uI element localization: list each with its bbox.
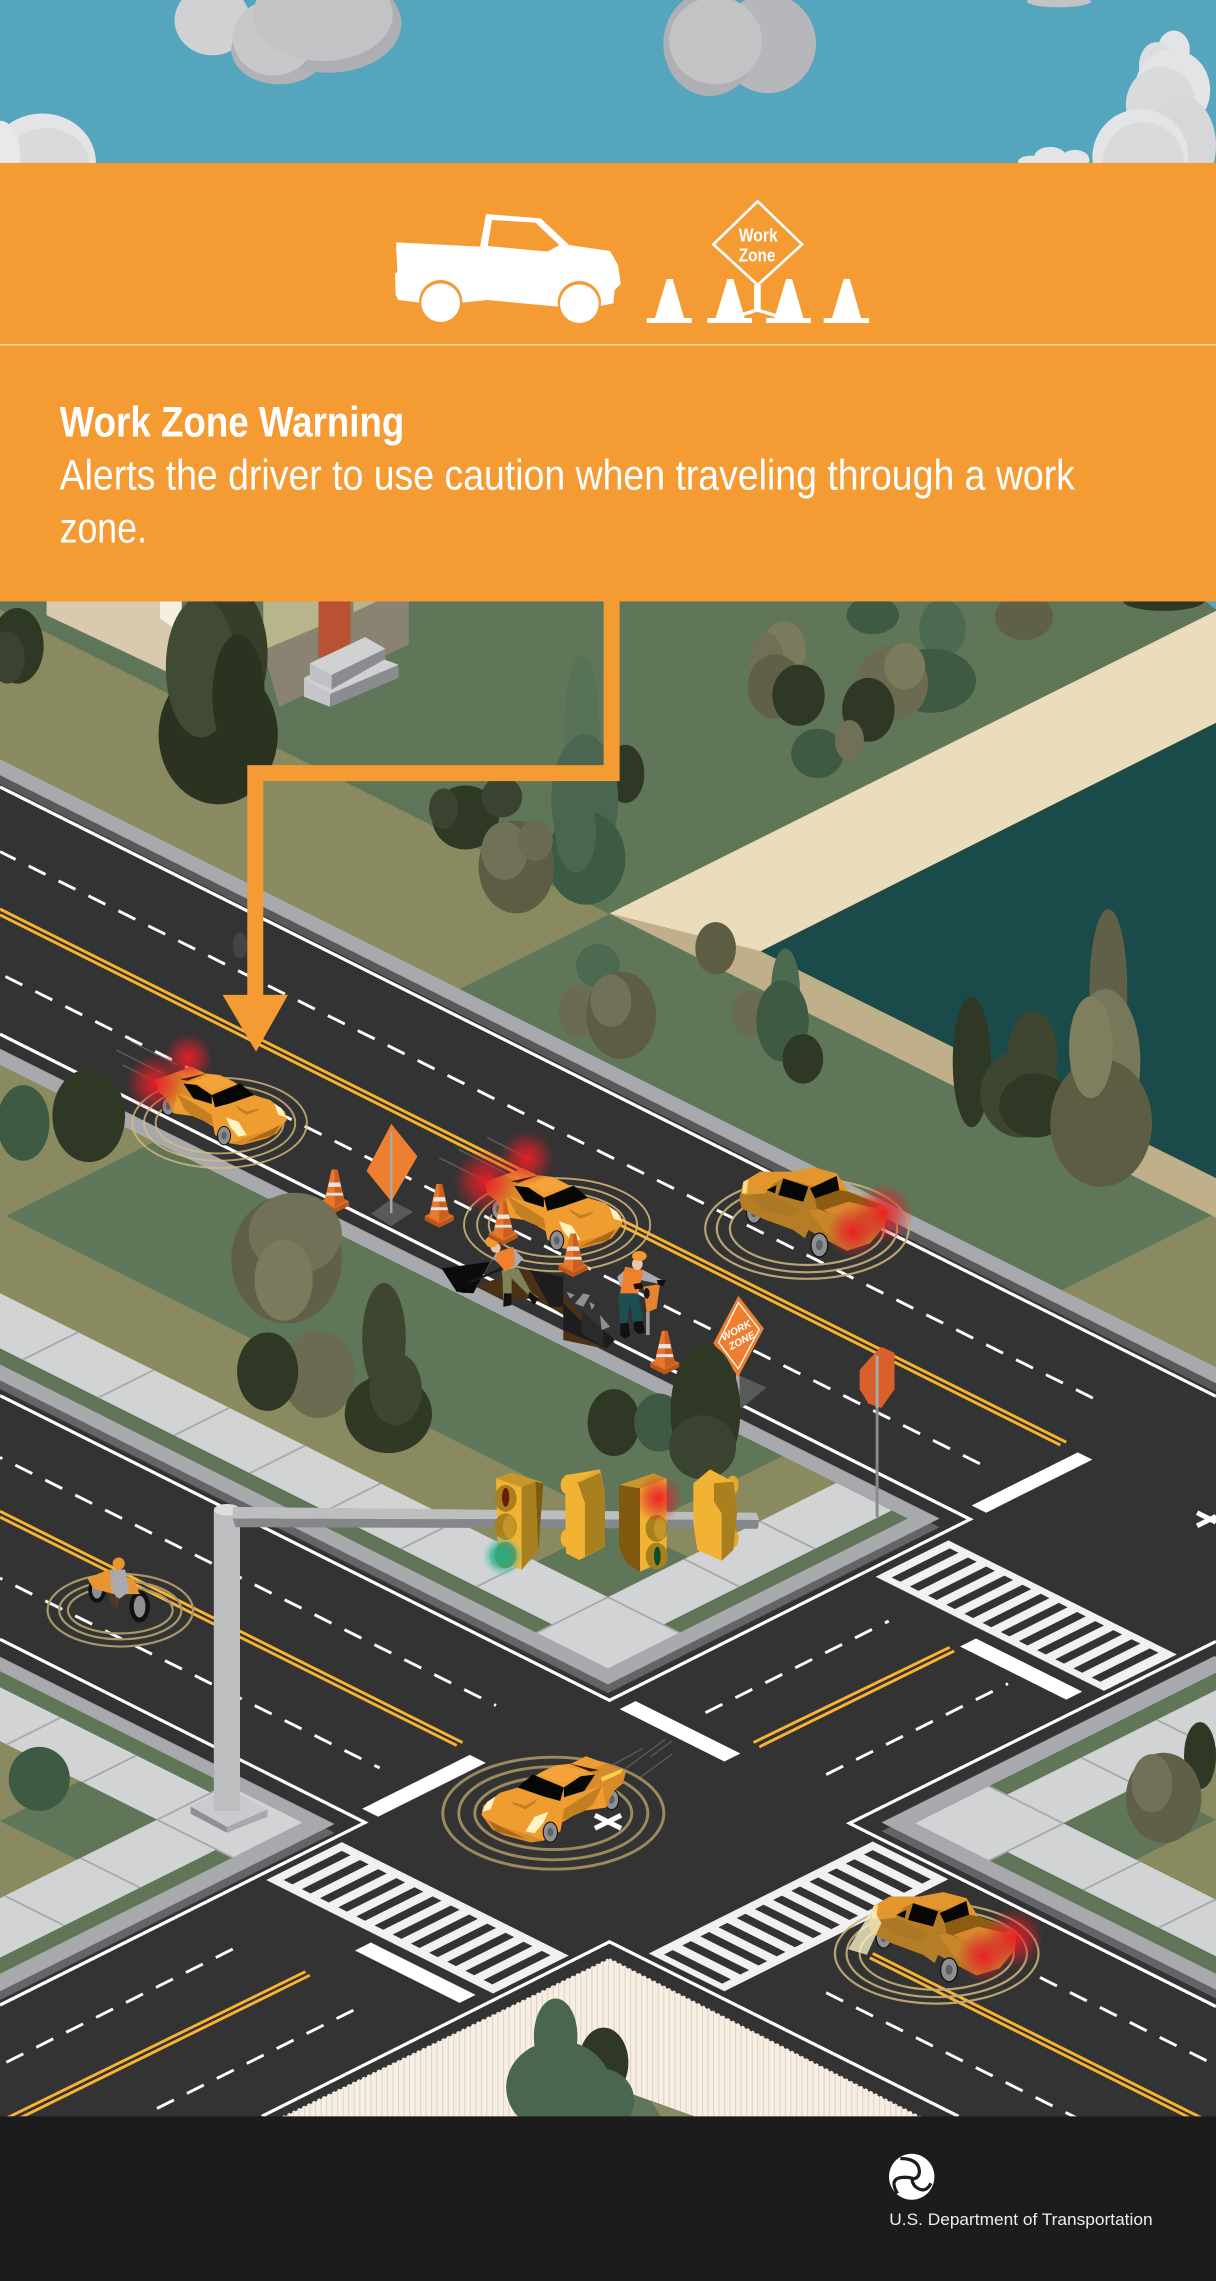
lamp post block [0,1657,335,2000]
stop sign [860,1347,895,1517]
pickup one [739,1167,914,1258]
department name: U.S. Department of Transportation [889,2211,1153,2229]
light four [693,1469,739,1561]
street scene [0,579,1216,2140]
pickup one sensor rings [705,1178,909,1279]
heading: Work Zone Warning [60,398,404,445]
car one sensor rings [132,1078,307,1168]
trees right of road [559,909,1152,1187]
trees behind arrow [429,655,644,913]
cones row one [320,1169,454,1228]
excavation and workers [442,1236,666,1348]
house steps [304,637,399,707]
lane dashes [0,852,1216,2140]
crosswalk lower left [266,1842,569,1993]
light one [482,1473,543,1577]
motorcycle [87,1558,150,1623]
light three [619,1473,682,1572]
icon: pickup truck [395,214,621,324]
trees behind fence [506,1999,634,2134]
work zone sign: ZONE [726,1329,758,1353]
house [47,599,409,707]
sky [0,0,1216,164]
shoreline [609,913,1216,1217]
trees lower sidewalks [9,1722,1216,1843]
car two [439,1131,622,1251]
road white edge lines [0,787,1216,2116]
icon: work zone sign and cones [647,201,869,323]
pickup two rings [835,1903,1039,2004]
trees left of road [0,1069,125,1162]
trees upper right [748,591,1204,778]
traffic lights [482,1469,739,1577]
road surfaces and kerbs [0,759,1216,2118]
description text: zone. [60,505,147,552]
arrow pointing to car [223,599,620,1052]
sign without text [367,1124,417,1226]
intersection car [481,1740,672,1843]
car one [116,1034,287,1145]
crosswalk lower right [649,1841,948,1991]
right block [881,1656,1216,1999]
cones row two [489,1201,679,1375]
icon: work zone sign and cones: Zone [739,245,775,266]
trees in median [231,1193,740,1479]
fence block [279,1956,924,2118]
clouds [0,0,1216,212]
light two [561,1469,605,1560]
motorcycle rings [48,1574,193,1647]
beach [609,611,1216,951]
excavation [442,1262,615,1348]
icon: work zone sign and cones: Work [739,224,778,245]
stop bars [217,1452,1216,2003]
pickup two [848,1892,1044,1983]
traffic signal mast [191,1504,759,1833]
water [761,723,1216,1178]
car two sensor rings [464,1178,650,1271]
header band [0,163,1216,601]
worker with jackhammer [617,1251,666,1339]
description text: Alerts the driver to use caution when traveling through a work [60,452,1076,499]
intersection markings [595,1513,1216,1828]
trees upper left [0,579,278,804]
worker with shovel [456,1236,538,1307]
icon: department logo [889,2154,934,2200]
double yellow centre lines [0,909,1210,2124]
crosswalk upper right [876,1540,1177,1691]
intersection car rings [443,1757,664,1869]
work zone sign [713,1296,767,1408]
footer [0,2116,1216,2281]
traffic block [0,1049,940,1693]
work zone sign: WORK [720,1318,754,1344]
